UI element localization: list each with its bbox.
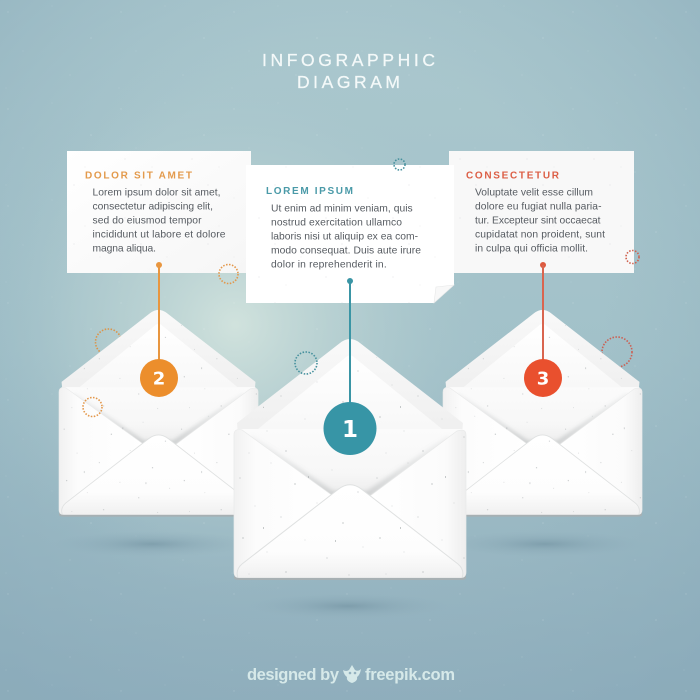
dashed ring: teal near center envelope bbox=[295, 352, 317, 374]
dashed ring: orange at card corner bbox=[219, 264, 238, 284]
ground shadow: left envelope bbox=[52, 531, 252, 557]
heading: dolor sit amet: DOLOR SIT AMET bbox=[85, 170, 192, 182]
title bbox=[262, 50, 435, 92]
text block: consectetur: cupidatat non proident, sunt bbox=[475, 230, 605, 240]
text block: dolor sit amet bbox=[92, 188, 226, 254]
text block: dolor sit amet: consectetur adipiscing elit, bbox=[92, 202, 213, 212]
text block: lorem ipsum: Ut enim ad minim veniam, quis bbox=[271, 204, 413, 214]
envelope 2 bbox=[59, 310, 258, 517]
text block: consectetur bbox=[475, 188, 605, 254]
envelope 1 bbox=[234, 339, 466, 580]
connector and badge 1 bbox=[324, 278, 376, 455]
text block: consectetur: tur. Excepteur sint occaecat bbox=[475, 216, 601, 226]
text block: consectetur: in culpa qui officia mollit. bbox=[475, 244, 588, 254]
dashed ring: teal above center card bbox=[394, 159, 405, 170]
connector and badge 3: 3 bbox=[537, 368, 549, 390]
dashed ring: orange on left envelope bbox=[83, 398, 102, 416]
text block: lorem ipsum: dolor in reprehenderit in. bbox=[271, 260, 387, 270]
text block: dolor sit amet: Lorem ipsum dolor sit amet, bbox=[92, 188, 220, 198]
icon: freepik bird bbox=[343, 665, 361, 683]
dashed ring: red behind right envelope bbox=[602, 337, 632, 367]
connector and badge 2: 2 bbox=[153, 368, 165, 390]
ground shadow: center envelope bbox=[248, 593, 448, 619]
text block: dolor sit amet: incididunt ut labore et dolore bbox=[92, 230, 226, 240]
heading: lorem ipsum: LOREM IPSUM bbox=[266, 186, 353, 197]
text block: dolor sit amet: sed do eiusmod tempor bbox=[92, 216, 202, 226]
footer credit: designed by bbox=[247, 666, 340, 684]
dashed ring: red at right card bbox=[626, 250, 639, 264]
footer credit: freepik.com bbox=[365, 666, 455, 684]
envelope 3 bbox=[443, 310, 642, 517]
text block: lorem ipsum: modo consequat. Duis aute irure bbox=[271, 246, 421, 256]
ground shadow: right envelope bbox=[445, 531, 645, 557]
text block: lorem ipsum: nostrud exercitation ullamco bbox=[271, 218, 402, 228]
footer credit bbox=[247, 665, 455, 684]
connector and badge 1: 1 bbox=[342, 417, 358, 443]
panel: dolor sit amet bbox=[67, 151, 251, 273]
connector and badge 2 bbox=[140, 262, 178, 397]
text block: lorem ipsum bbox=[271, 204, 421, 270]
text block: lorem ipsum: laboris nisi ut aliquip ex ea com- bbox=[271, 232, 418, 242]
dashed ring: orange behind left envelope bbox=[96, 329, 122, 355]
connector and badge 3 bbox=[524, 262, 562, 397]
panel: lorem ipsum bbox=[246, 165, 454, 303]
title: INFOGRAPPHIC bbox=[262, 50, 435, 70]
heading: consectetur: CONSECTETUR bbox=[466, 170, 560, 182]
text block: consectetur: dolore eu fugiat nulla paria- bbox=[475, 202, 602, 212]
title: DIAGRAM bbox=[297, 72, 400, 92]
panel: consectetur bbox=[449, 151, 634, 273]
text block: dolor sit amet: magna aliqua. bbox=[92, 244, 156, 254]
text block: consectetur: Voluptate velit esse cillum bbox=[475, 188, 593, 198]
